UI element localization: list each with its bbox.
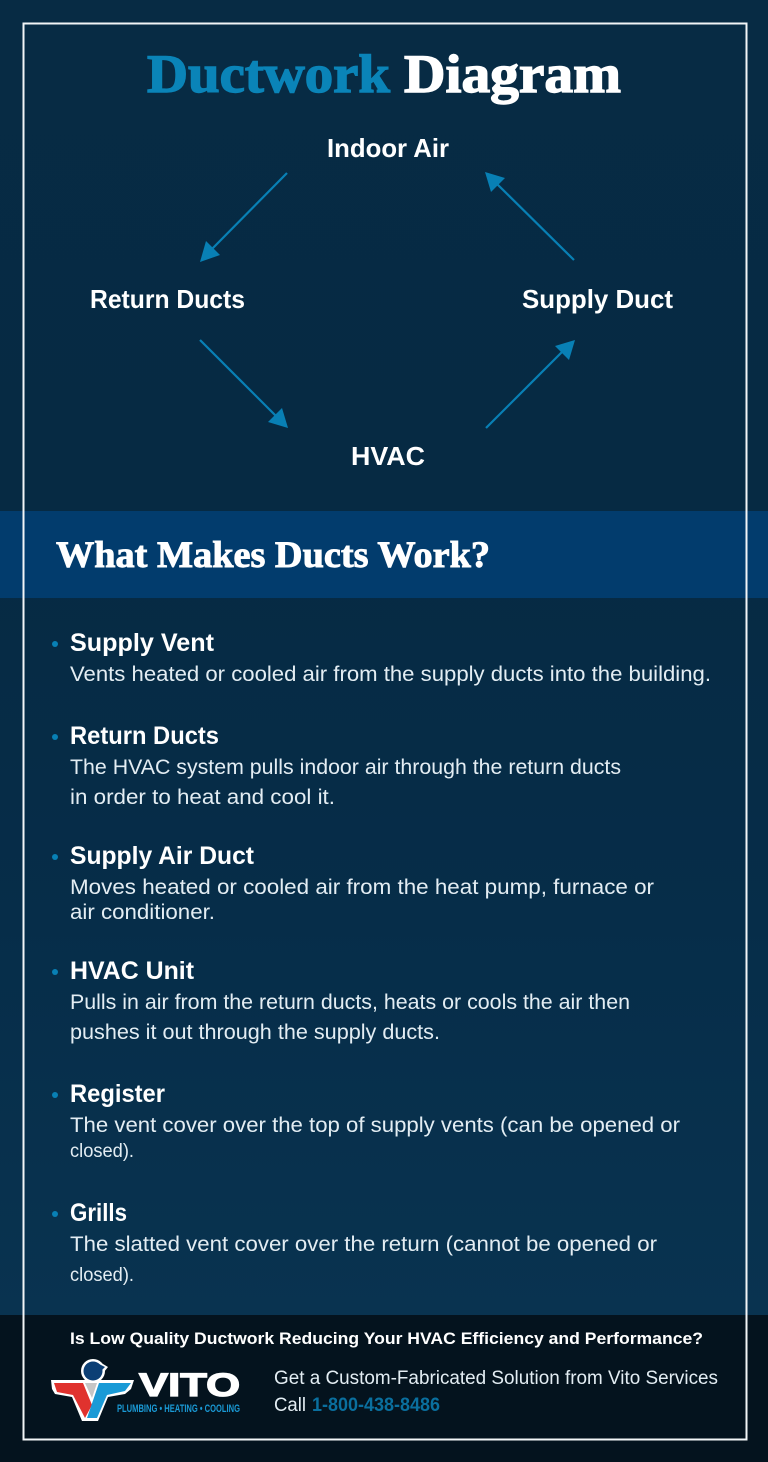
diagram: air flow cycle (90, 133, 673, 471)
list: duct components (52, 629, 711, 1286)
item: Register (52, 1080, 680, 1162)
item: Supply Air Duct (52, 842, 654, 924)
item: Supply Vent: Supply Vent (70, 629, 215, 657)
item: HVAC Unit: Pulls in air from the return ducts, heats or cools the air then (70, 991, 630, 1014)
title (147, 44, 621, 104)
footer text: phone: 1-800-438-8486 (312, 1395, 440, 1416)
section band: What Makes Ducts Work?: What Makes Ducts Work? (56, 535, 490, 576)
title: Diagram (404, 44, 621, 104)
arrow: return ducts to HVAC (200, 340, 288, 428)
label: Supply Duct: Supply Duct (522, 284, 673, 314)
item: Return Ducts: Return Ducts (70, 722, 219, 750)
item: Grills: The slatted vent cover over the return (cannot be opened or (70, 1233, 657, 1256)
footer background (0, 1315, 768, 1462)
arrow: supply duct to indoor air (485, 172, 574, 260)
item: Register: The vent cover over the top of supply vents (can be opened or (70, 1114, 680, 1137)
item: Return Ducts (52, 722, 621, 809)
item: Grills: Grills (70, 1199, 127, 1227)
item: Grills: closed). (70, 1265, 134, 1286)
item: Supply Vent (52, 629, 711, 686)
item: Grills (52, 1199, 657, 1286)
footer heading: Is Low Quality Ductwork Reducing Your HVAC Efficiency and Performance? (70, 1329, 703, 1348)
label: Return Ducts: Return Ducts (90, 284, 245, 314)
item: Supply Vent: Vents heated or cooled air from the supply ducts into the building. (70, 663, 711, 686)
item: Register: closed). (70, 1141, 134, 1162)
title: Ductwork (147, 44, 390, 104)
item: Return Ducts: in order to heat and cool it. (70, 786, 335, 809)
logo: Vito: PLUMBING • HEATING • COOLING (117, 1403, 240, 1415)
logo: Vito: VITO (139, 1367, 240, 1403)
footer text: phone: Call (274, 1395, 306, 1416)
arrow: indoor air to return ducts (200, 173, 287, 262)
item: Supply Air Duct: air conditioner. (70, 901, 215, 924)
item: Register: Register (70, 1080, 165, 1108)
section band: What Makes Ducts Work? (0, 511, 768, 598)
logo: Vito (51, 1359, 240, 1421)
label: Indoor Air: Indoor Air (327, 133, 449, 163)
item: Return Ducts: The HVAC system pulls indoor air through the return ducts (70, 756, 621, 779)
item: HVAC Unit: pushes it out through the supply ducts. (70, 1021, 440, 1044)
item: HVAC Unit: HVAC Unit (70, 957, 195, 985)
footer text: custom solution: Get a Custom-Fabricated Solution from Vito Services (274, 1368, 718, 1389)
arrow: HVAC to supply duct (486, 340, 575, 428)
item: Supply Air Duct: Moves heated or cooled air from the heat pump, furnace or (70, 876, 654, 899)
footer call to action (51, 1329, 718, 1421)
label: HVAC: HVAC (351, 441, 425, 471)
item: Supply Air Duct: Supply Air Duct (70, 842, 255, 870)
item: HVAC Unit (52, 957, 630, 1044)
